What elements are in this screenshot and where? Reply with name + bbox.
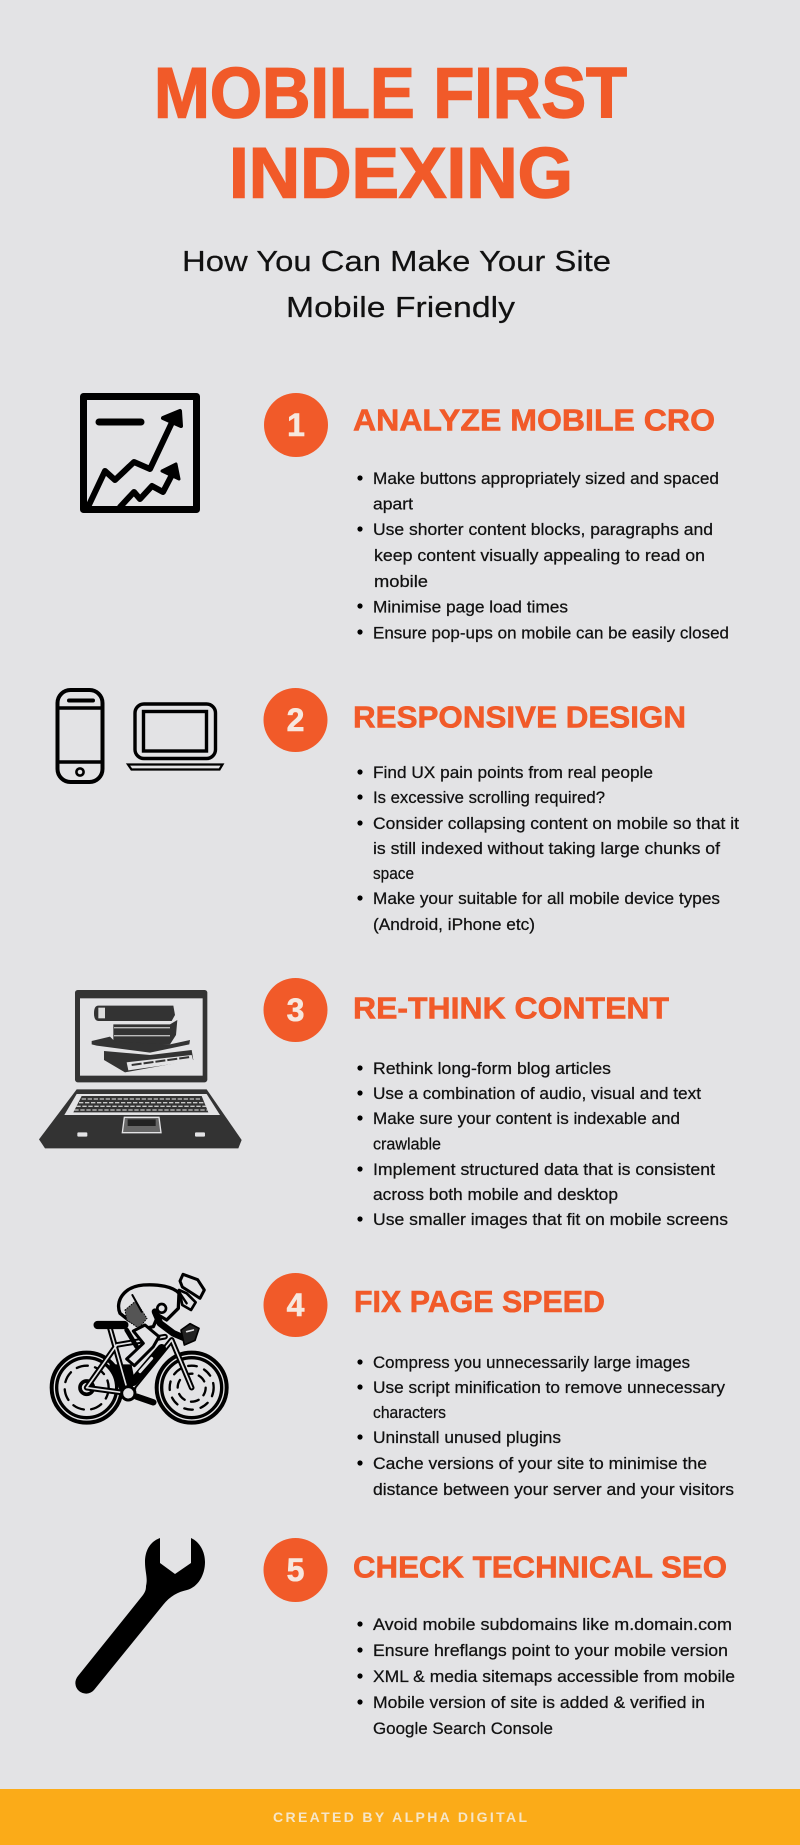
bullet list 4: Compress you unnecessarily large images <box>373 1353 690 1372</box>
bullet list 3: across both mobile and desktop <box>373 1185 618 1204</box>
icon: laptop with books <box>39 990 242 1148</box>
bullet list 2: Is excessive scrolling required? <box>373 788 605 807</box>
number badge 1: 1 <box>287 407 305 443</box>
bullet list 3: Use a combination of audio, visual and text <box>373 1084 701 1103</box>
bullet list 2: space <box>373 864 414 883</box>
bike frame <box>87 1325 192 1402</box>
bullet list 4: characters <box>373 1403 446 1422</box>
bullet list 3: Implement structured data that is consistent <box>373 1160 715 1179</box>
panel: step 4 fix page speed <box>52 1273 734 1499</box>
number badge 1 <box>264 393 328 457</box>
panel: step 5 check technical SEO <box>75 1538 735 1738</box>
number badge 4 <box>264 1273 328 1337</box>
bullet list 1: apart <box>373 494 413 513</box>
bullet list 1 <box>357 469 729 642</box>
bullet list 2 <box>357 763 739 934</box>
icon: wrench <box>75 1538 205 1694</box>
title: INDEXING <box>229 134 573 214</box>
bullet list 2: (Android, iPhone etc) <box>373 915 535 934</box>
bullet list 5: Google Search Console <box>373 1719 553 1738</box>
bullet list 4 <box>357 1353 734 1499</box>
bullet list 2: Find UX pain points from real people <box>373 763 653 782</box>
subtitle: Mobile Friendly <box>286 292 516 324</box>
bullet list 4: Cache versions of your site to minimise the <box>373 1454 707 1473</box>
rear wheel <box>52 1353 122 1423</box>
bullet list 5: Mobile version of site is added & verified in <box>373 1693 705 1712</box>
front wheel <box>157 1353 227 1423</box>
bullet list 3: Use smaller images that fit on mobile screens <box>373 1210 728 1229</box>
bullet list 1: Use shorter content blocks, paragraphs and <box>373 520 713 539</box>
icon: phone and laptop <box>58 690 222 782</box>
title <box>154 54 627 214</box>
number badge 2: 2 <box>287 702 304 738</box>
icon: cyclist <box>52 1274 227 1423</box>
bullet list 5: Avoid mobile subdomains like m.domain.com <box>373 1615 732 1634</box>
panel: step 2 responsive design <box>58 688 739 934</box>
laptop keyboard base <box>39 1089 242 1148</box>
number badge 3: 3 <box>287 992 304 1028</box>
subtitle: How You Can Make Your Site <box>182 246 611 278</box>
heading 4: FIX PAGE SPEED <box>354 1284 605 1319</box>
bullet list 2: is still indexed without taking large chunks of <box>373 839 720 858</box>
bullet list 1: mobile <box>374 572 428 591</box>
heading 2: RESPONSIVE DESIGN <box>353 700 686 734</box>
bullet list 1: Minimise page load times <box>373 597 568 616</box>
bullet list 5: Ensure hreflangs point to your mobile version <box>373 1641 728 1660</box>
bullet list 1: keep content visually appealing to read on <box>374 546 705 565</box>
bullet list 4: distance between your server and your visitors <box>373 1480 734 1499</box>
bullet list 5: XML & media sitemaps accessible from mobile <box>373 1667 735 1686</box>
bullet list 1: Make buttons appropriately sized and spaced <box>373 469 719 488</box>
icon: growth chart <box>84 396 196 510</box>
bullet list 3: Make sure your content is indexable and <box>373 1109 680 1128</box>
number badge 5: 5 <box>287 1552 304 1588</box>
heading 1: ANALYZE MOBILE CRO <box>353 402 715 438</box>
bullet list 1: Ensure pop-ups on mobile can be easily closed <box>373 623 729 642</box>
number badge 3 <box>264 978 328 1042</box>
footer: CREATED BY ALPHA DIGITAL <box>273 1809 527 1825</box>
title: MOBILE FIRST <box>154 54 627 134</box>
panel: step 3 re-think content <box>39 978 728 1229</box>
bullet list 3: crawlable <box>373 1134 441 1153</box>
bullet list 5 <box>357 1615 735 1738</box>
bullet list 2: Make your suitable for all mobile device types <box>373 889 720 908</box>
rider body <box>119 1285 199 1366</box>
number badge 2 <box>264 688 328 752</box>
bullet list 4: Use script minification to remove unnecessary <box>373 1378 726 1397</box>
heading 3: RE-THINK CONTENT <box>353 990 669 1026</box>
bullet list 3: Rethink long-form blog articles <box>373 1059 611 1078</box>
panel: step 1 analyze mobile CRO <box>84 393 729 642</box>
number badge 4: 4 <box>287 1287 305 1323</box>
bullet list 2: Consider collapsing content on mobile so that it <box>373 814 739 833</box>
laptop screen with books <box>75 990 207 1082</box>
bullet list 3 <box>357 1059 728 1229</box>
bullet list 4: Uninstall unused plugins <box>373 1428 561 1447</box>
number badge 5 <box>264 1538 328 1602</box>
footer <box>0 1789 800 1845</box>
heading 5: CHECK TECHNICAL SEO <box>353 1550 727 1584</box>
subtitle <box>182 246 611 324</box>
rider helmet and face <box>179 1274 204 1310</box>
